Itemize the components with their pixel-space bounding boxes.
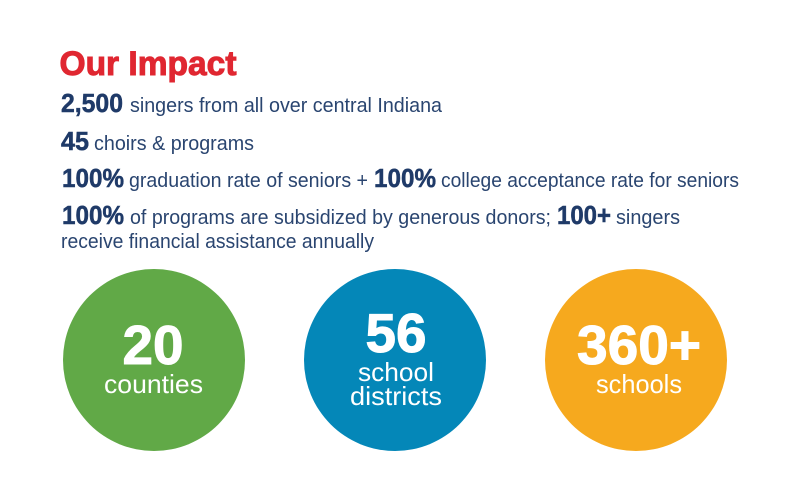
panel: school districts circle — [304, 269, 486, 451]
text block: graduation and college acceptance statistic: 100% — [374, 163, 436, 193]
text block: choirs statistic — [61, 126, 254, 156]
panel: schools circle: schools — [596, 369, 682, 399]
text block: graduation and college acceptance statistic — [62, 163, 739, 193]
text block: singers statistic: singers from all over central Indiana — [130, 94, 443, 117]
panel: schools circle — [545, 269, 727, 451]
text block: subsidized programs statistic — [61, 200, 680, 253]
text block: subsidized programs statistic: singers — [616, 206, 680, 229]
text block: singers statistic — [61, 88, 443, 118]
text block: graduation and college acceptance statistic: college acceptance rate for seniors — [441, 169, 739, 192]
panel: schools circle: 360+ — [577, 314, 701, 376]
panel: school districts circle: 56 — [366, 302, 426, 364]
text block: singers statistic: 2,500 — [61, 88, 123, 118]
panel: school districts circle: school — [358, 357, 434, 387]
text block: subsidized programs statistic: receive financial assistance annually — [61, 230, 375, 253]
text block: subsidized programs statistic: 100% — [62, 200, 124, 230]
text block: graduation and college acceptance statistic: 100% — [62, 163, 124, 193]
text block: subsidized programs statistic: of programs are subsidized by generous donors; — [130, 206, 551, 229]
panel: school districts circle: districts — [350, 381, 442, 411]
panel: counties circle — [63, 269, 245, 451]
text block: choirs statistic: choirs & programs — [94, 132, 254, 155]
text block: subsidized programs statistic: 100+ — [557, 200, 611, 230]
text block: choirs statistic: 45 — [61, 126, 89, 156]
title: Our Impact — [60, 45, 236, 83]
text block: graduation and college acceptance statistic: graduation rate of seniors + — [129, 169, 368, 192]
panel: counties circle: counties — [104, 369, 203, 399]
panel: counties circle: 20 — [122, 314, 184, 376]
